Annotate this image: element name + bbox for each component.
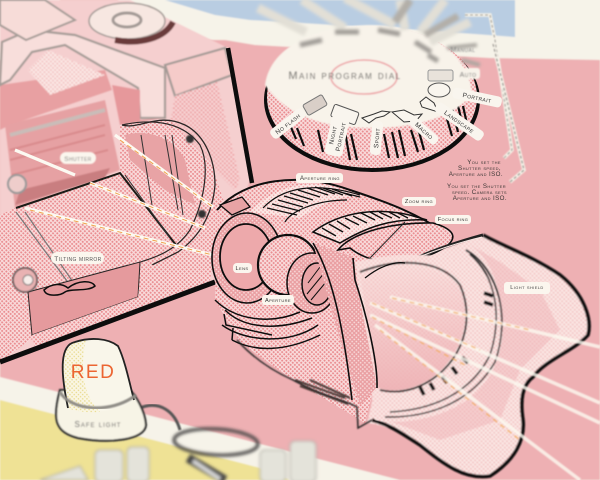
- shutter and viewfinder rays: [15, 135, 213, 255]
- label: auto and manual: Auto: [460, 72, 476, 79]
- safe light word: RED: [71, 362, 115, 383]
- label: aperture: [262, 295, 294, 305]
- note: shutter priority: speed. Camera sets: [452, 189, 507, 196]
- label: landscape: [433, 101, 485, 142]
- lens: [212, 173, 600, 480]
- dial title: Main program dial: [288, 70, 402, 82]
- label: night portrait: Night: [328, 125, 339, 145]
- label: shutter: Shutter: [64, 156, 92, 163]
- label: no flash: No flash: [274, 112, 302, 136]
- label: aperture ring: [296, 173, 343, 183]
- blurred top icons and rays: [258, 0, 480, 65]
- cable loop: [173, 427, 259, 457]
- note: you set all: You set the: [467, 159, 501, 166]
- dial face with blurred top: [265, 25, 472, 128]
- label: lens: Lens: [236, 266, 248, 272]
- label: night portrait: Portrait: [335, 122, 348, 152]
- label: auto and manual: [451, 47, 480, 79]
- label: aperture: Aperture: [265, 298, 291, 304]
- rear lens elements: [212, 213, 337, 348]
- label: zoom ring: [402, 197, 436, 206]
- label: zoom ring: Zoom ring: [405, 199, 433, 205]
- safe light base: [56, 390, 146, 441]
- label: no flash: [269, 107, 307, 140]
- label: focus ring: Focus ring: [438, 217, 468, 223]
- dome collar: [60, 392, 136, 408]
- safe light dome: [63, 339, 134, 412]
- film canisters, out of focus: [40, 427, 316, 480]
- note: you set all: Aperture and ISO.: [449, 171, 503, 178]
- note: shutter priority: You set the Shutter: [447, 183, 506, 190]
- label: auto and manual: Manual: [451, 47, 475, 54]
- screws and knobs: [8, 135, 206, 292]
- label: sport: Sport: [373, 128, 382, 148]
- front barrel walls: [313, 243, 405, 405]
- note: you set all: Shutter speed,: [458, 165, 501, 172]
- mode icons: [302, 70, 453, 125]
- canisters: [40, 441, 316, 480]
- glass disc: [355, 250, 503, 422]
- safe light cable: [140, 405, 180, 430]
- camera top, out of focus: [0, 0, 250, 362]
- label: shutter: [60, 152, 96, 164]
- label: focus ring: [435, 215, 471, 224]
- label: landscape: Landscape: [442, 110, 475, 135]
- camera body heavy outline: [0, 48, 252, 362]
- label: aperture ring: Aperture ring: [300, 176, 340, 182]
- dial body with hatched rim: [264, 26, 480, 172]
- grip panels and hatched body: [0, 120, 225, 362]
- note: shutter priority: Aperture and ISO.: [453, 195, 507, 202]
- mirror: [16, 173, 215, 348]
- light rays through lens: [370, 297, 600, 480]
- light shield: [367, 235, 589, 477]
- camera body: [0, 0, 252, 362]
- exposure mode notes: [447, 159, 507, 202]
- label: night portrait: [324, 115, 350, 157]
- label: sport: [370, 121, 383, 155]
- label: light shield: Light shield: [510, 285, 544, 291]
- label: tilting mirror: [51, 252, 104, 264]
- label: portrait: Portrait: [462, 92, 492, 105]
- cable plug: [188, 458, 225, 480]
- label: tilting mirror: Tilting mirror: [54, 256, 102, 263]
- safe light caption: Safe light: [75, 420, 121, 429]
- label: macro: [408, 116, 440, 146]
- label: portrait: [452, 87, 503, 108]
- label: macro: Macro: [413, 121, 434, 141]
- label: lens: [233, 263, 252, 273]
- lower barrel: [237, 340, 372, 428]
- dashed leader lines: [465, 15, 524, 182]
- label: light shield: [504, 282, 550, 294]
- mode labels: [269, 87, 503, 157]
- program dial: [258, 0, 503, 172]
- safe light: [56, 339, 180, 441]
- barrel body: [215, 180, 483, 423]
- front glass: [237, 243, 503, 428]
